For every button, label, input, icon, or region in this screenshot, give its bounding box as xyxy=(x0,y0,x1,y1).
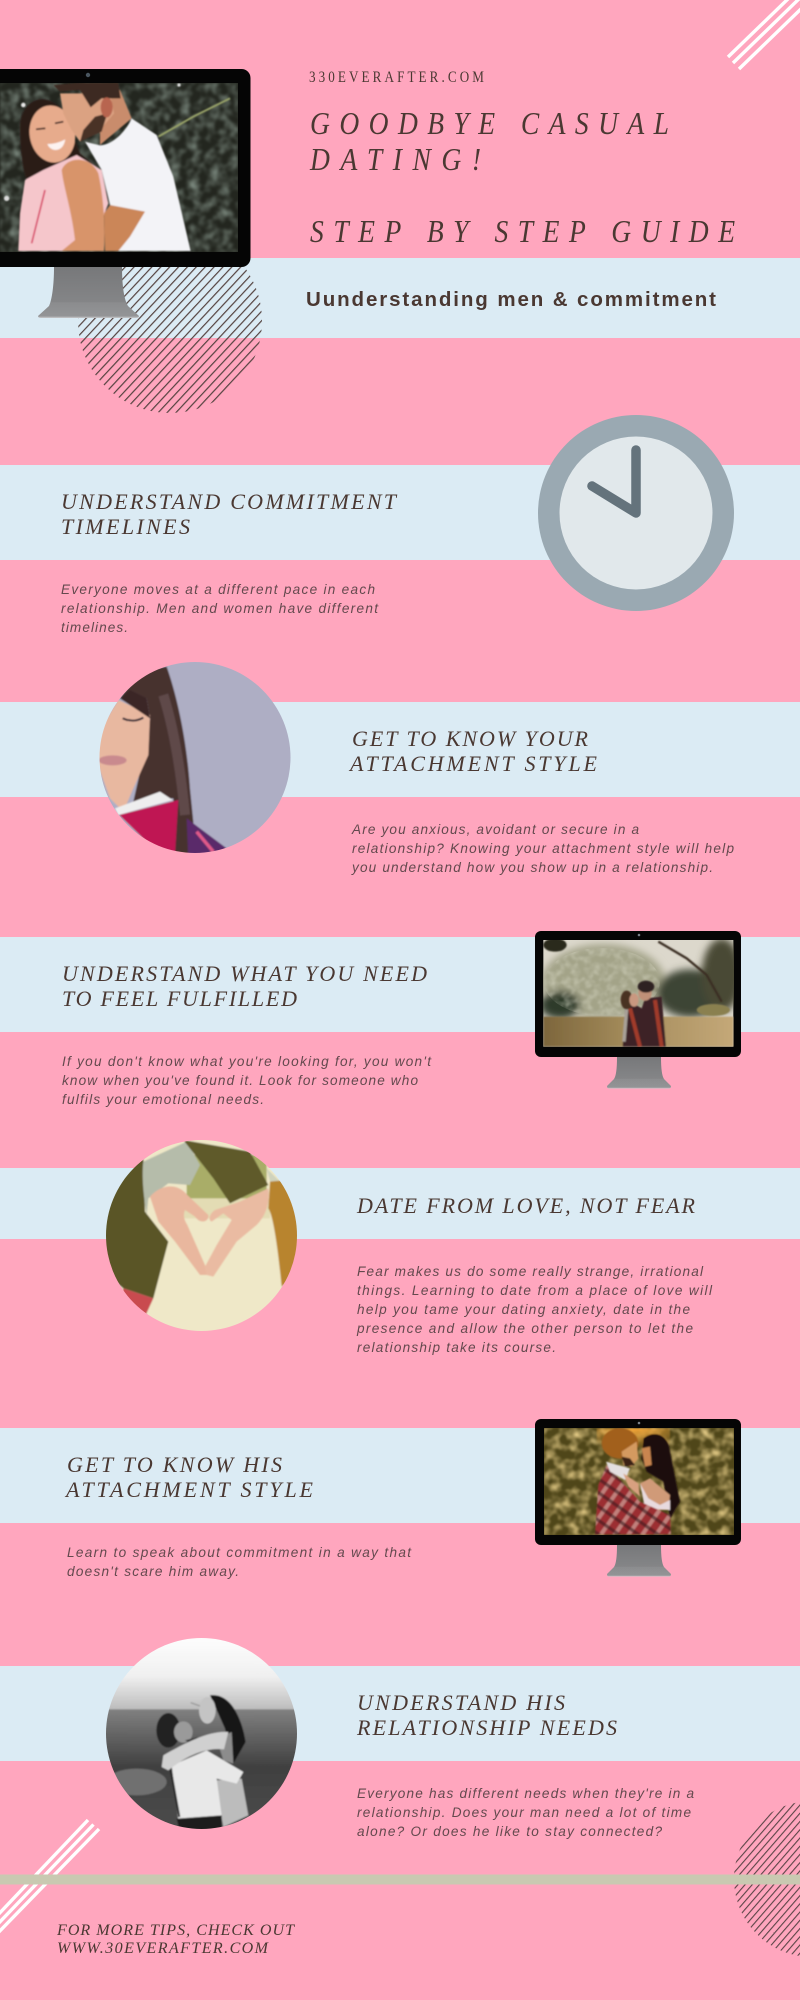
body: step 2 xyxy=(351,822,734,875)
heading: step 1 xyxy=(61,489,398,539)
heading: step 6 xyxy=(356,1690,617,1740)
photo: sunset meadow xyxy=(544,1428,734,1535)
body: step 4: relationship take its course. xyxy=(357,1340,556,1355)
body: step 2: relationship? Knowing your attachment style will help xyxy=(352,841,734,856)
monitor: couple kissing in a field xyxy=(535,931,742,1088)
footer divider xyxy=(0,1874,800,1884)
title xyxy=(309,106,735,250)
subtitle: Uunderstanding men & commitment xyxy=(306,288,716,311)
body: step 3: fulfils your emotional needs. xyxy=(62,1092,264,1107)
body: step 4: Fear makes us do some really strange, irrational xyxy=(357,1264,704,1279)
body: step 6: Everyone has different needs when they're in a xyxy=(357,1786,694,1801)
decoration: hatched circle bottom right xyxy=(734,1801,800,1957)
heading: step 5: ATTACHMENT STYLE xyxy=(64,1477,314,1502)
body: step 1: timelines. xyxy=(61,620,128,635)
body: step 4: presence and allow the other person to let the xyxy=(356,1321,693,1336)
band: step 6 xyxy=(0,1666,800,1761)
heading: step 2: GET TO KNOW YOUR xyxy=(352,726,589,751)
heading: step 3: TO FEEL FULFILLED xyxy=(62,986,297,1011)
heading: step 5: GET TO KNOW HIS xyxy=(67,1452,282,1477)
monitor frame xyxy=(535,931,741,1057)
body: step 5 xyxy=(67,1545,412,1579)
title: DATING! xyxy=(309,142,481,178)
body: step 5: doesn't scare him away. xyxy=(67,1564,239,1579)
heading: step 4: DATE FROM LOVE, NOT FEAR xyxy=(356,1193,696,1218)
heading: step 3: UNDERSTAND WHAT YOU NEED xyxy=(62,961,427,986)
band: header xyxy=(0,258,800,338)
monitor: couple at sunset xyxy=(535,1419,741,1576)
photo: black and white couple embracing xyxy=(106,1638,297,1829)
heading: step 6: UNDERSTAND HIS xyxy=(357,1690,565,1715)
photo: hands forming a heart xyxy=(106,1140,297,1331)
decoration: white diagonal lines top right xyxy=(728,0,800,69)
body: step 1 xyxy=(61,582,379,635)
photo: woman reading red book xyxy=(100,662,290,853)
body: step 6: alone? Or does he like to stay connected? xyxy=(357,1824,662,1839)
site name: 330EVERAFTER.COM xyxy=(309,69,484,86)
band: step 1 xyxy=(0,465,800,560)
heading: step 1: UNDERSTAND COMMITMENT xyxy=(61,489,398,514)
monitor stand xyxy=(38,267,139,318)
body: step 2: you understand how you show up in a relationship. xyxy=(351,860,713,875)
body: step 4 xyxy=(356,1264,713,1355)
footer text: WWW.30EVERAFTER.COM xyxy=(57,1940,270,1957)
clock icon xyxy=(538,415,734,611)
body: step 4: things. Learning to date from a place of love will xyxy=(357,1283,713,1298)
heading: step 1: TIMELINES xyxy=(61,514,190,539)
body: step 3: If you don't know what you're looking for, you won't xyxy=(62,1054,432,1069)
band: step 5 xyxy=(0,1428,800,1523)
band: step 2 xyxy=(0,702,800,797)
body: step 2: Are you anxious, avoidant or secure in a xyxy=(351,822,639,837)
webcam xyxy=(638,934,640,936)
decoration: white diagonal lines bottom left xyxy=(0,1820,99,1937)
heading: step 2: ATTACHMENT STYLE xyxy=(348,751,598,776)
heading: step 3 xyxy=(62,961,427,1011)
body: step 1: relationship. Men and women have different xyxy=(61,601,379,616)
title: GOODBYE CASUAL xyxy=(310,106,669,142)
webcam xyxy=(638,1422,640,1424)
body: step 5: Learn to speak about commitment in a way that xyxy=(67,1545,412,1560)
monitor frame xyxy=(0,69,250,267)
photo: field and trees xyxy=(540,938,742,1047)
band: step 4 xyxy=(0,1168,800,1239)
body: step 4: help you tame your dating anxiety, date in the xyxy=(357,1302,690,1317)
body: step 3 xyxy=(62,1054,432,1107)
body: step 6: relationship. Does your man need a lot of time xyxy=(357,1805,691,1820)
monitor stand xyxy=(607,1545,671,1576)
photo: couple hugging in front of foliage xyxy=(0,83,238,252)
footer text: FOR MORE TIPS, CHECK OUT xyxy=(56,1922,295,1939)
heading: step 2 xyxy=(348,726,598,776)
band: step 3 xyxy=(0,937,800,1032)
decoration: hatched circle top xyxy=(78,229,262,413)
heading: step 5 xyxy=(64,1452,314,1502)
footer text xyxy=(56,1922,295,1957)
body: step 1: Everyone moves at a different pace in each xyxy=(61,582,375,597)
monitor stand xyxy=(607,1057,671,1088)
monitor: hero couple xyxy=(0,69,250,318)
webcam xyxy=(86,73,90,77)
monitor frame xyxy=(535,1419,741,1545)
title: STEP BY STEP GUIDE xyxy=(310,214,735,250)
body: step 3: know when you've found it. Look for someone who xyxy=(62,1073,418,1088)
heading: step 6: RELATIONSHIP NEEDS xyxy=(356,1715,617,1740)
body: step 6 xyxy=(357,1786,694,1839)
